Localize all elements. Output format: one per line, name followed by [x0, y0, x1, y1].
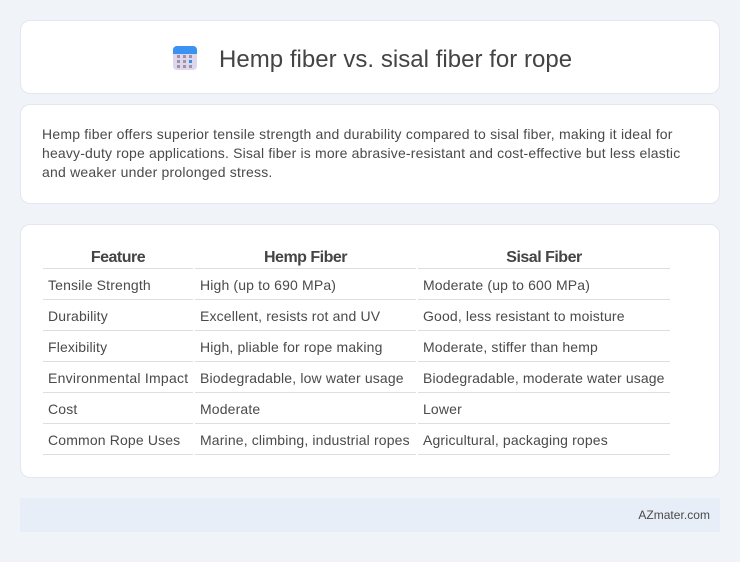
table row: common rope uses: Agricultural, packaging ropes [423, 432, 608, 448]
table row: flexibility: High, pliable for rope making [200, 339, 383, 355]
table row: flexibility: Moderate, stiffer than hemp [423, 339, 598, 355]
table row: environmental impact: Biodegradable, low water usage [200, 370, 404, 386]
table row: durability: Good, less resistant to moisture [423, 308, 625, 324]
title: Hemp fiber vs. sisal fiber for rope [219, 46, 572, 73]
table row: common rope uses: Common Rope Uses [48, 432, 180, 448]
panel: summary [20, 104, 720, 204]
table row: common rope uses [43, 423, 670, 455]
table row: cost: Moderate [200, 401, 260, 417]
table row: cost [43, 392, 670, 417]
footer credit: AZmater.com [638, 508, 710, 522]
text block: summary: and weaker under prolonged stress. [42, 164, 272, 180]
table row: durability [43, 299, 670, 324]
table row: flexibility [43, 330, 670, 355]
table row: environmental impact: Environmental Impact [48, 370, 188, 386]
table header: Feature [91, 249, 145, 266]
text block: summary [42, 126, 680, 180]
panel: comparison table [20, 224, 720, 478]
table header: Sisal Fiber [506, 249, 582, 266]
table row: durability: Excellent, resists rot and UV [200, 308, 380, 324]
table row: tensile strength: Tensile Strength [48, 277, 151, 293]
table row: flexibility: Flexibility [48, 339, 107, 355]
footer bar [20, 498, 720, 532]
table row: environmental impact [43, 361, 670, 386]
table row: tensile strength: Moderate (up to 600 MPa) [423, 277, 590, 293]
table row: tensile strength [43, 268, 670, 293]
icon: calendar [173, 46, 197, 70]
table header [91, 249, 582, 266]
table row: durability: Durability [48, 308, 108, 324]
table header: Hemp Fiber [264, 249, 347, 266]
panel: title card [20, 20, 720, 94]
table row: environmental impact: Biodegradable, moderate water usage [423, 370, 665, 386]
text block: summary: heavy-duty rope applications. Sisal fiber is more abrasive-resistant and cost-effective but less elastic [42, 145, 680, 161]
table row: tensile strength: High (up to 690 MPa) [200, 277, 336, 293]
table row: cost: Lower [423, 401, 462, 417]
table row: common rope uses: Marine, climbing, industrial ropes [200, 432, 410, 448]
text block: summary: Hemp fiber offers superior tensile strength and durability compared to sisal fiber, making it ideal for [42, 126, 673, 142]
table row: cost: Cost [48, 401, 77, 417]
